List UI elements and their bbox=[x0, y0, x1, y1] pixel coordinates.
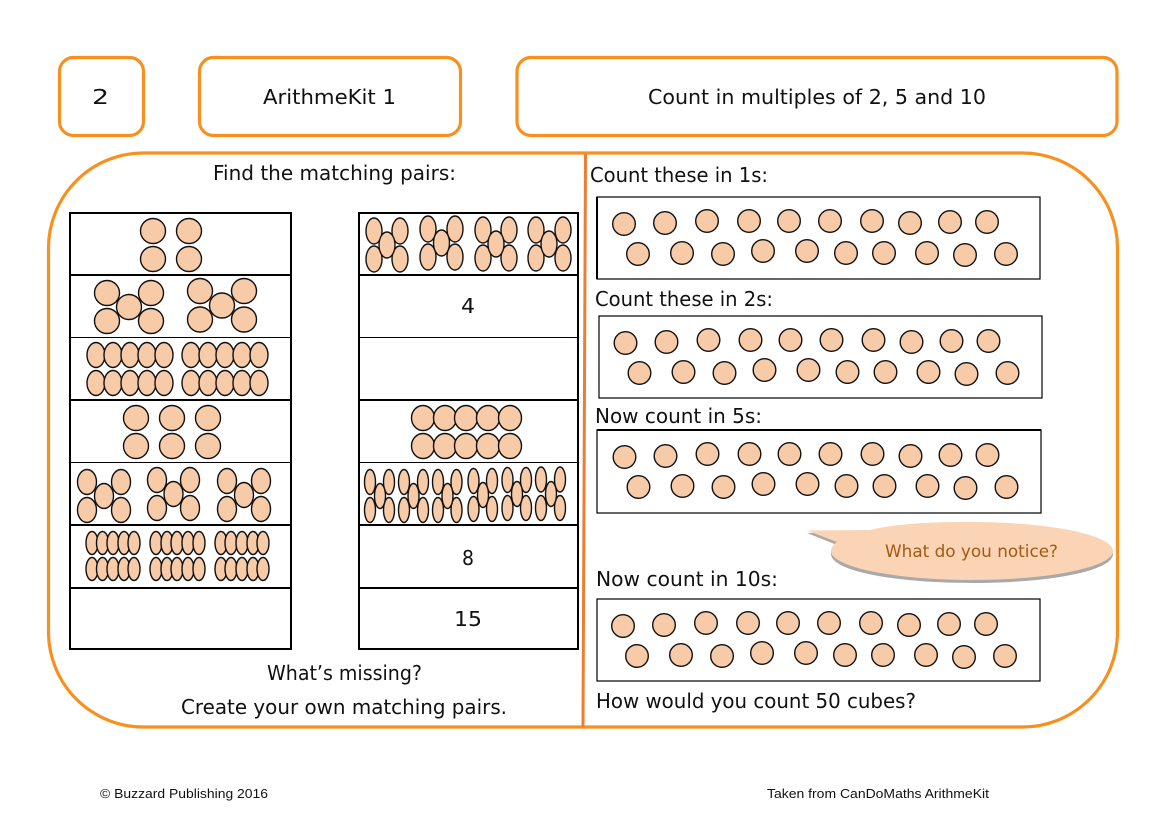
panel: matching pairs bbox=[70, 161, 578, 719]
header box: page number bbox=[60, 58, 144, 136]
heading: count in 2s: Count these in 2s: bbox=[595, 287, 773, 311]
header box: page number: 2 bbox=[92, 85, 109, 109]
footer: source: Taken from CanDoMaths ArithmeKit bbox=[767, 786, 989, 801]
left row 5: three groups of 5 ovals bbox=[78, 468, 270, 522]
text: what's missing: What’s missing? bbox=[267, 661, 422, 685]
dot box: 5s bbox=[597, 430, 1041, 513]
right row 1: four groups of 5 ovals bbox=[366, 216, 571, 272]
left row 4: 6 circles bbox=[124, 406, 220, 458]
panel: counting bbox=[590, 163, 1113, 713]
left row 1: 4 circles bbox=[140, 218, 202, 272]
dot box: 1s bbox=[597, 197, 1040, 279]
dot box: 2s bbox=[599, 316, 1042, 398]
text: create your own matching pairs: Create your own matching pairs. bbox=[181, 695, 507, 719]
right row 7: number 15: 15 bbox=[454, 607, 482, 631]
text: how would you count 50 cubes: How would you count 50 cubes? bbox=[596, 689, 916, 713]
callout: what do you notice bbox=[807, 522, 1113, 583]
callout: what do you notice: What do you notice? bbox=[885, 542, 1058, 562]
right row 2: number 4: 4 bbox=[461, 294, 475, 318]
left row 3: two groups of 10 ovals bbox=[87, 342, 268, 396]
right table grid bbox=[359, 213, 578, 649]
right row 5: six groups of 5 thin ovals bbox=[364, 467, 566, 522]
left row 2: two groups of 5 circles bbox=[94, 278, 256, 334]
panel divider bbox=[583, 154, 586, 727]
heading: count in 1s: Count these in 1s: bbox=[590, 163, 768, 187]
footer: copyright: © Buzzard Publishing 2016 bbox=[100, 786, 268, 801]
heading: find the matching pairs: Find the matching pairs: bbox=[213, 161, 456, 185]
header box: kit title bbox=[200, 58, 460, 136]
left table grid bbox=[70, 213, 291, 649]
heading: count in 10s: Now count in 10s: bbox=[596, 567, 778, 591]
main panel frame bbox=[48, 153, 1118, 727]
right row 6: number 8: 8 bbox=[462, 546, 474, 570]
dot box: 10s bbox=[597, 599, 1040, 681]
header box: kit title: ArithmeKit 1 bbox=[263, 85, 396, 109]
left row 6: three groups of 10 thin ovals bbox=[86, 532, 269, 580]
header box: topic bbox=[517, 58, 1117, 136]
header box: topic: Count in multiples of 2, 5 and 10 bbox=[648, 85, 986, 109]
right row 4: 10 circles bbox=[412, 406, 522, 458]
heading: count in 5s: Now count in 5s: bbox=[595, 404, 762, 428]
